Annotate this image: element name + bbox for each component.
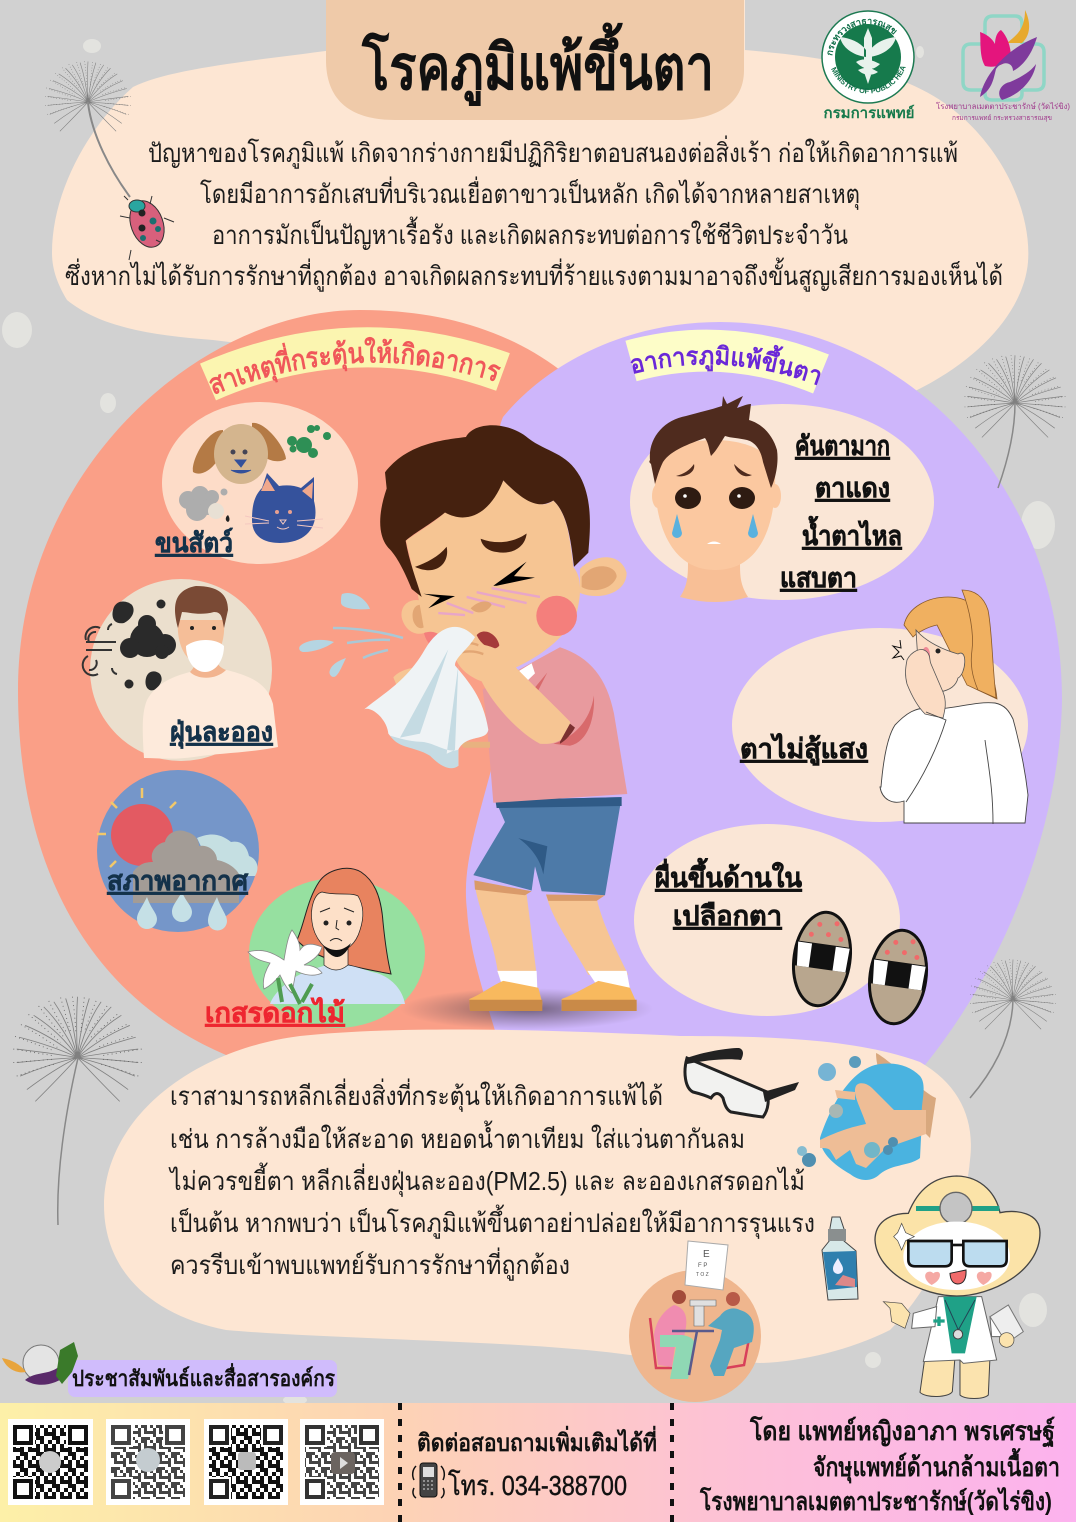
text block: intro: โดยมีอาการอักเสบที่บริเวณเยื่อตาขาวเป็นหลัก เกิดได้จากหลายสาเหตุ (200, 176, 860, 210)
QR code 2 (106, 1419, 190, 1505)
label: สภาพอากาศ (107, 866, 249, 896)
labels: ตาแดง (815, 473, 890, 503)
title tab (326, 0, 744, 120)
tissue (364, 627, 488, 767)
text block: prevention advice: เป็นต้น หากพบว่า เป็นโรคภูมิแพ้ขึ้นตาอย่าปล่อยให้มีอาการรุนแรง (170, 1204, 815, 1239)
logo: hospital (936, 10, 1070, 122)
closed eyes (423, 562, 535, 608)
label: ขนสัตว์ (155, 527, 233, 558)
text block: prevention advice: ไม่ควรขยี้ตา หลีกเลี่ยงฝุ่นละออง(PM2.5) และ ละอองเกสรดอกไม้ (168, 1162, 805, 1197)
icon: safety goggles (685, 1048, 799, 1117)
heading: symptoms: อาการภูมิแพ้ขึ้นตา (630, 344, 820, 386)
label: เกสรดอกไม้ (205, 997, 345, 1028)
text block: prevention advice: เช่น การล้างมือให้สะอาด หยอดน้ำตาเทียม ใส่แว่นตากันลม (170, 1120, 745, 1154)
text block: intro: อาการมักเป็นปัญหาเรื้อรัง และเกิดผลกระทบต่อการใช้ชีวิตประจำวัน (212, 216, 848, 250)
hair (380, 425, 590, 597)
decoration: dandelion lower left (13, 997, 142, 1225)
icon: eye chart: E (703, 1249, 710, 1260)
panel: intro blob (52, 0, 1028, 400)
face (406, 480, 580, 672)
far hand (393, 668, 423, 689)
QR codes (8, 1419, 384, 1505)
author block (699, 1415, 1060, 1516)
socks (497, 971, 630, 989)
icon: red sun (97, 788, 176, 867)
icon: eye chart: F P (698, 1263, 707, 1269)
panel: bumps inside eyelid: เปลือกตา (673, 901, 782, 931)
legs (475, 886, 628, 975)
labels (780, 431, 902, 593)
icon: eye chart (685, 1241, 728, 1290)
shoes (469, 981, 637, 1011)
ears (580, 557, 627, 596)
shadow (400, 988, 653, 1030)
logo: department of medical services: กรมการแพทย์ (824, 104, 914, 122)
text block: prevention advice: เราสามารถหลีกเลี่ยงสิ่งที่กระตุ้นให้เกิดอาการแพ้ได้ (170, 1078, 663, 1112)
cheek (536, 596, 577, 636)
icon: cloud (133, 830, 257, 903)
QR code 4 (300, 1419, 384, 1505)
mouth (477, 632, 499, 648)
icon: dog (193, 423, 286, 484)
panel: causes circle (18, 310, 560, 1076)
panel: weather (97, 770, 259, 932)
sparkle (894, 1223, 914, 1250)
icon: sneeze droplets (299, 593, 403, 677)
icon: eyelids (788, 909, 932, 1027)
decoration: dandelion upper right (965, 355, 1065, 488)
label: ผื่นขึ้นด้านใน (655, 857, 803, 893)
coat (923, 1297, 997, 1363)
icon: grey dust (179, 486, 228, 521)
panel: pollen (205, 868, 425, 1028)
icon: eye drops (822, 1217, 858, 1300)
icon: woman with flower (248, 868, 405, 1004)
mascot: doctor (875, 1176, 1040, 1398)
panel: light sensitivity (732, 590, 1028, 824)
text block: prevention advice (168, 1078, 815, 1281)
labels: แสบตา (780, 563, 857, 593)
logo: hospital: กรมการแพทย์ กระทรวงสาธารณสุข (952, 114, 1052, 122)
blush lines (438, 588, 540, 615)
panel: symptoms circle (466, 322, 1062, 1065)
labels: คันตามาก (795, 431, 890, 461)
icon: bird emblem (2, 1342, 78, 1385)
footer band (0, 1403, 1076, 1522)
stethoscope (945, 1300, 975, 1330)
panel: dust and smoke (83, 579, 278, 761)
nose (471, 601, 492, 612)
panel: itchy eyes (630, 396, 934, 602)
icon: woman rubbing eye (880, 590, 1028, 824)
decoration: dandelion with ladybug (45, 62, 174, 260)
panel: bumps inside eyelid (634, 824, 932, 1027)
tag: public relations (2, 1342, 337, 1397)
icon: black smoke (112, 600, 176, 690)
clover badge (933, 1317, 945, 1326)
glasses (908, 1241, 1007, 1266)
cheeks and mouth (925, 1272, 992, 1285)
text block: intro: ปัญหาของโรคภูมิแพ้ เกิดจากร่างกายมีปฏิกิริยาตอบสนองต่อสิ่งเร้า ก่อให้เกิดอาการแพ้ (148, 135, 958, 169)
text block: prevention advice: ควรรีบเข้าพบแพทย์รับการรักษาที่ถูกต้อง (170, 1247, 570, 1281)
icon: doctor and patient (650, 1290, 754, 1379)
title: โรคภูมิแพ้ขึ้นตา (361, 22, 714, 106)
panel: prevention blob (104, 1029, 971, 1363)
text block: intro (65, 135, 1003, 292)
icon: wind lines (83, 624, 117, 675)
label: ประชาสัมพันธ์และสื่อสารองค์กร (72, 1362, 335, 1391)
contact block: ติดต่อสอบถามเพิ่มเติมได้ที่ (417, 1425, 657, 1457)
illustration: sneezing boy (364, 425, 653, 1030)
shorts (473, 797, 622, 895)
labels: น้ำตาไหล (802, 515, 902, 551)
QR code 3 (204, 1419, 288, 1505)
decoration: dandelion lower right (970, 960, 1056, 1098)
contact block (413, 1425, 657, 1501)
heading: causes: สาเหตุที่กระตุ้นให้เกิดอาการ (209, 336, 501, 394)
eyebrows (415, 533, 527, 570)
arm (455, 644, 570, 744)
icon: washing hands (797, 1053, 936, 1180)
logo: hospital: โรงพยาบาลเมตตาประชารักษ์ (วัดไร่ขิง) (936, 101, 1070, 111)
legs (920, 1357, 990, 1398)
panel: animal fur (155, 402, 358, 564)
label: ตาไม่สู้แสง (740, 733, 868, 766)
face (903, 1222, 1010, 1290)
label: ฝุ่นละออง (170, 717, 273, 749)
QR code 1 (8, 1419, 93, 1505)
shirt (483, 647, 627, 803)
hat (875, 1176, 1040, 1296)
icon: phone (413, 1463, 444, 1498)
icon: eye chart: T O Z (696, 1272, 709, 1278)
icon: cat (245, 473, 323, 543)
contact block: โทร. 034-388700 (448, 1469, 627, 1501)
icon: man with mask (143, 586, 278, 759)
icon: green germs (287, 425, 331, 458)
hand and clipboard (883, 1302, 910, 1328)
collar (515, 663, 535, 685)
logo: department of medical services: กระทรวงสาธารณสุข (827, 18, 897, 56)
icon: rain drops (137, 892, 227, 931)
logo: department of medical services (821, 10, 915, 122)
panel: eye exam (629, 1241, 761, 1402)
icon: crying boy (649, 396, 781, 602)
